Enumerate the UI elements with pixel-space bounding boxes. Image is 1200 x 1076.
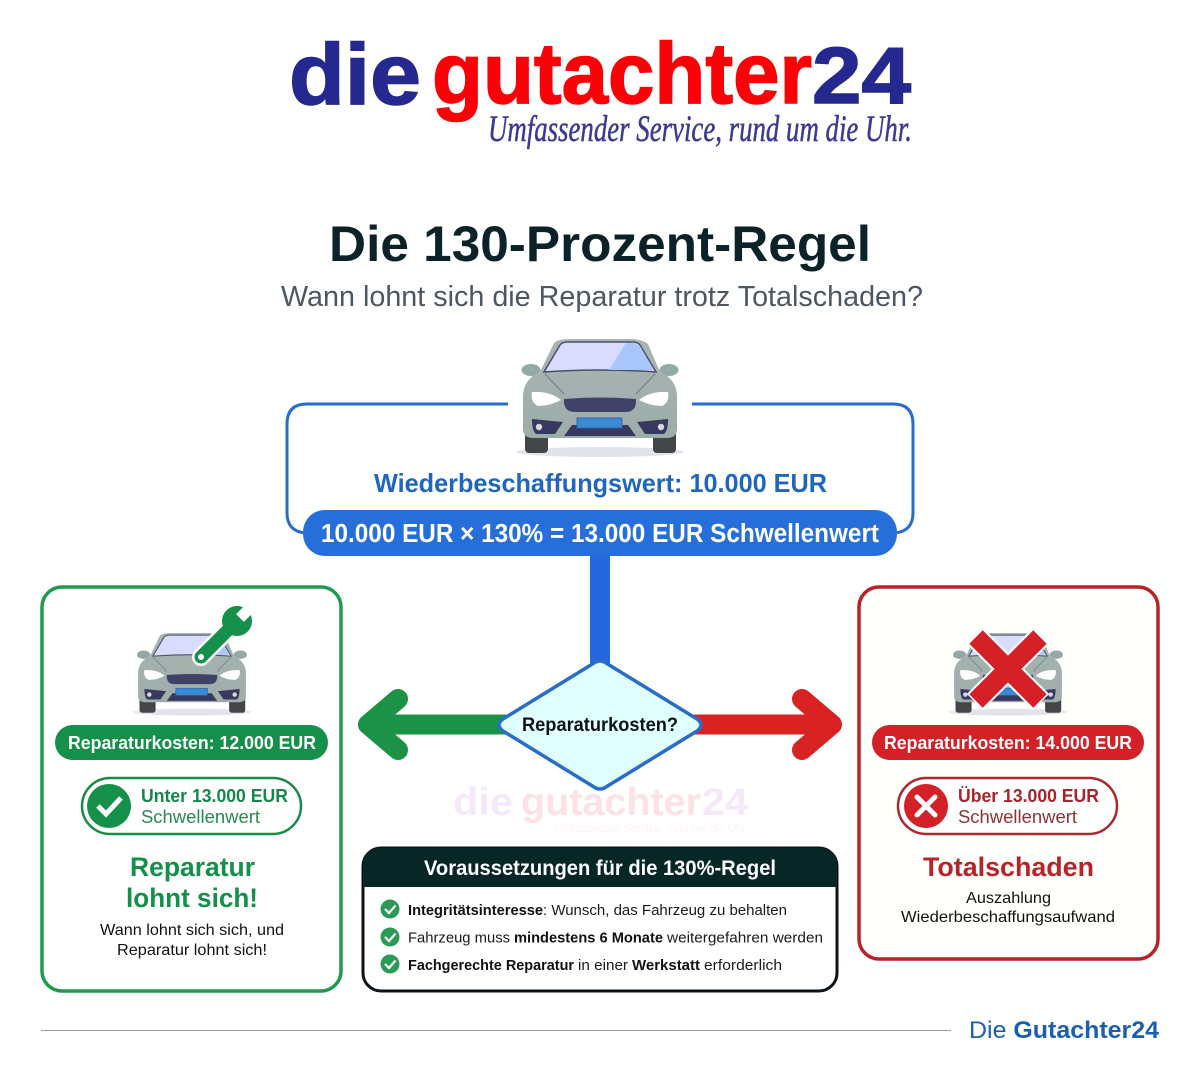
panel: repair worthwhile — [42, 587, 341, 991]
requirement 3 — [380, 954, 782, 974]
requirement 3: Fachgerechte Reparatur — [408, 957, 574, 974]
icon: car — [516, 339, 684, 457]
description: Reparatur lohnt sich! — [117, 942, 267, 959]
heading — [126, 852, 258, 913]
requirement 3: Werkstatt — [632, 957, 700, 974]
icon: car with wrench — [133, 602, 256, 716]
requirement 2 — [380, 928, 823, 946]
requirements header — [363, 848, 837, 887]
watermark: die — [453, 781, 513, 824]
requirement 1: : Wunsch, das Fahrzeug zu behalten — [543, 902, 787, 919]
watermark: 24 — [702, 782, 748, 824]
heading: Totalschaden — [923, 852, 1094, 882]
watermark: Umfassender Service, rund um die Uhr. — [555, 823, 748, 835]
requirement 3: in einer — [578, 957, 628, 974]
requirements header: Voraussetzungen für die 130%-Regel — [424, 857, 776, 880]
icon: car crossed out — [949, 633, 1067, 716]
threshold badge: Über 13.000 EUR — [958, 786, 1099, 806]
logo: die — [289, 27, 421, 123]
logo: gutachter — [432, 26, 812, 122]
repair cost pill — [55, 725, 328, 760]
description: Wann lohnt sich sich, und — [100, 922, 284, 939]
repair cost pill: Reparaturkosten: 12.000 EUR — [68, 733, 316, 753]
logo — [289, 26, 912, 150]
threshold formula pill — [303, 510, 897, 556]
threshold badge — [82, 778, 301, 834]
threshold badge: Schwellenwert — [141, 807, 260, 827]
arrow: right red — [690, 699, 832, 750]
subtitle: Wann lohnt sich die Reparatur trotz Totalschaden? — [281, 281, 923, 313]
decision diamond: Reparaturkosten? — [522, 714, 678, 736]
requirement 2: Fahrzeug muss — [408, 930, 510, 946]
heading: lohnt sich! — [126, 883, 258, 913]
title: Die 130-Prozent-Regel — [329, 216, 871, 272]
repair cost pill — [872, 725, 1144, 760]
threshold badge: Schwellenwert — [958, 807, 1077, 827]
heading: Reparatur — [130, 852, 255, 882]
threshold formula pill: 10.000 EUR × 130% = 13.000 EUR Schwellenwert — [321, 520, 879, 548]
connector: down to decision — [590, 556, 610, 666]
requirement 1 — [380, 900, 787, 919]
panel: total loss — [859, 587, 1158, 959]
description — [100, 922, 284, 959]
requirement 2: mindestens 6 Monate — [514, 930, 663, 946]
threshold badge — [898, 778, 1117, 834]
decision diamond — [499, 661, 701, 789]
panel: value frame — [287, 339, 913, 556]
footer: Die Gutachter24 — [969, 1017, 1160, 1044]
repair cost pill: Reparaturkosten: 14.000 EUR — [884, 733, 1132, 753]
requirement 1: Integritätsinteresse — [408, 902, 543, 919]
arrow: left green — [368, 699, 510, 750]
logo: 24 — [812, 31, 912, 120]
requirement 2: weitergefahren werden — [666, 930, 823, 946]
description — [901, 890, 1115, 926]
description: Auszahlung — [966, 890, 1051, 907]
watermark: gutachter — [521, 781, 701, 824]
description: Wiederbeschaffungsaufwand — [901, 909, 1115, 926]
replacement value: Wiederbeschaffungswert: 10.000 EUR — [374, 468, 827, 498]
threshold badge: Unter 13.000 EUR — [141, 786, 288, 806]
panel: requirements — [363, 848, 837, 991]
logo: Umfassender Service, rund um die Uhr. — [488, 109, 912, 150]
requirement 3: erforderlich — [704, 957, 782, 974]
watermark — [453, 781, 748, 835]
